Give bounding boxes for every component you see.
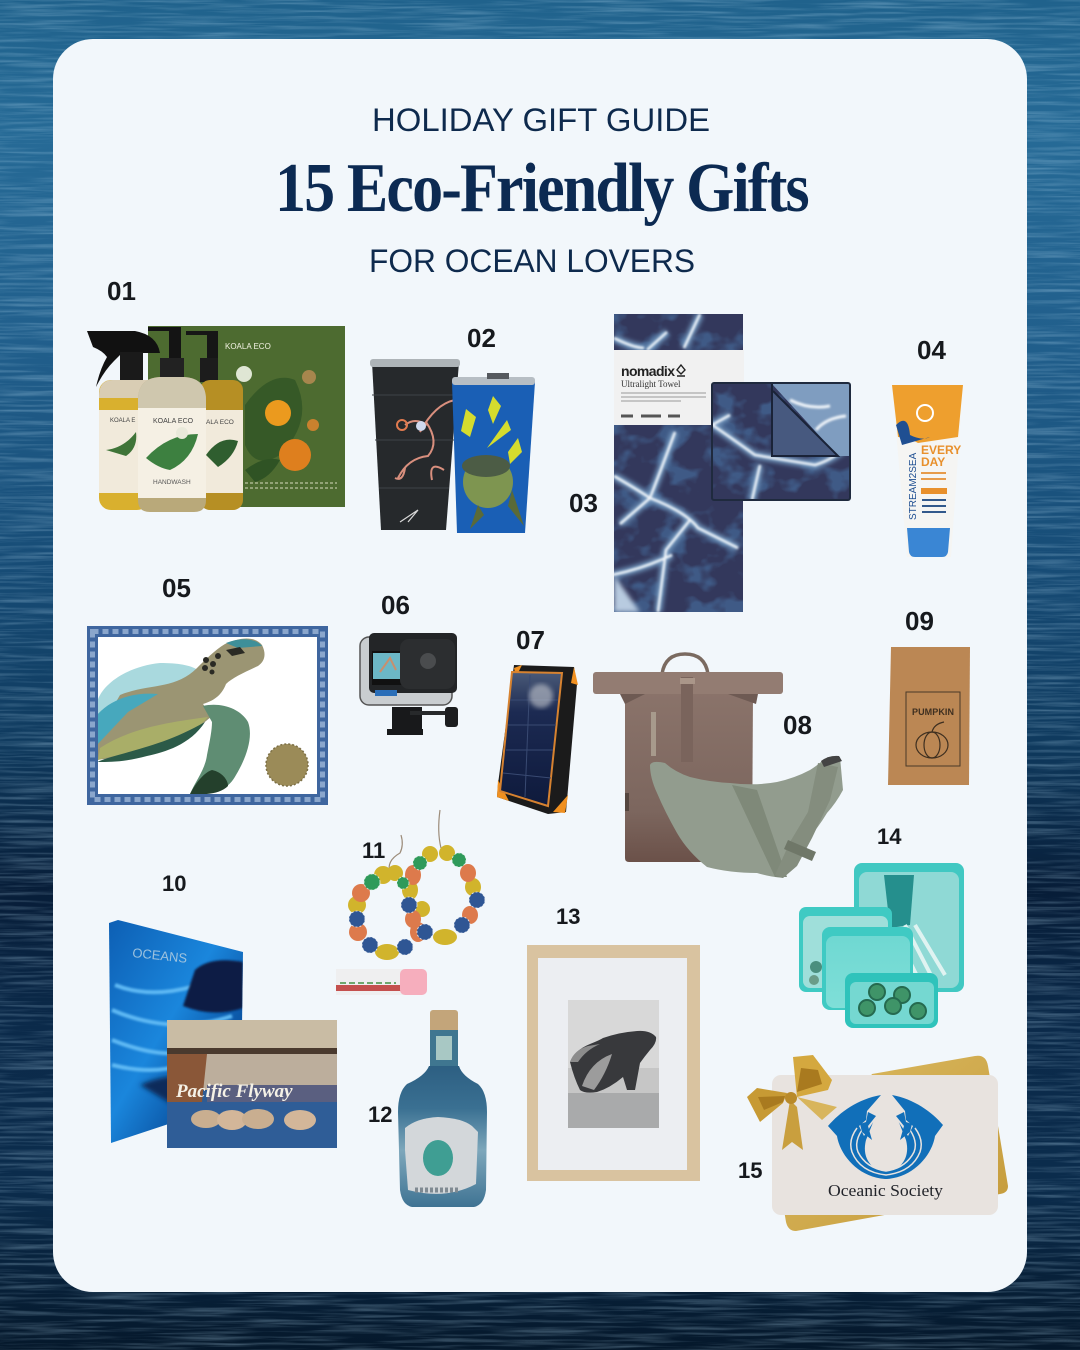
label 09: 09 [905, 606, 934, 636]
gold seal [266, 744, 308, 786]
item 04: Stream2Sea sunscreen: EVERY [921, 443, 961, 457]
sling bag [650, 756, 843, 878]
Oceans book [109, 920, 243, 1143]
item 04: Stream2Sea sunscreen: DAY [921, 455, 945, 469]
Pacific Flyway book: Pacific Flyway [175, 1081, 293, 1102]
item 15: Oceanic Society gift card [747, 1055, 1008, 1231]
item 05: turtle adoption certificate [87, 626, 328, 805]
folded towel [705, 383, 850, 500]
lip balm [336, 969, 427, 995]
long towel [612, 314, 744, 612]
small bag with kiwi [845, 973, 938, 1028]
title: 15 Eco-Friendly Gifts [275, 150, 808, 227]
label 13: 13 [556, 904, 580, 929]
label 02: 02 [467, 323, 496, 353]
large bag [854, 863, 964, 992]
blue tumbler [452, 373, 535, 533]
item 01: Koala Eco gift set [87, 326, 345, 512]
item 11: beaded earrings [348, 810, 485, 960]
long towel: nomadix [621, 363, 675, 379]
gold back card [784, 1056, 1008, 1231]
Oceans book: OCEANS [132, 945, 188, 966]
item 03: Nomadix towel [612, 314, 850, 612]
label 05: 05 [162, 573, 191, 603]
handwash bottle: KOALA ECO [153, 418, 194, 425]
item 06: GoPro camera [360, 633, 458, 735]
label 15: 15 [738, 1158, 762, 1183]
item 10: ocean books [109, 920, 337, 1148]
card text: Oceanic Society [828, 1181, 944, 1200]
handwash bottle: HANDWASH [153, 479, 191, 486]
green gift box: KOALA ECO [225, 342, 271, 351]
left bag [799, 907, 892, 992]
certificate border [87, 626, 328, 805]
subtitle: FOR OCEAN LOVERS [369, 243, 695, 279]
whale photograph [568, 1000, 659, 1128]
spray bottle [87, 331, 160, 510]
roll-top backpack [593, 654, 783, 862]
green gift box [148, 326, 345, 507]
label 07: 07 [516, 625, 545, 655]
spray bottle: KOALA E [110, 418, 135, 424]
dolphin logo [828, 1095, 943, 1179]
handwash bottle [138, 327, 206, 512]
item 14: silicone storage bags [799, 863, 964, 1028]
item 09: pumpkin tea pouch: PUMPKIN [912, 707, 954, 717]
soap bottle right: ALA ECO [206, 419, 234, 426]
middle bag [822, 927, 913, 1010]
item 08: backpack and sling bag [593, 654, 843, 878]
gold bow [747, 1055, 837, 1150]
soap bottle right [186, 331, 243, 510]
item 13: whale framed print [527, 945, 700, 1181]
item 07: solar power bank [497, 665, 578, 814]
item 09: pumpkin tea pouch [888, 647, 970, 785]
item 04: Stream2Sea sunscreen [892, 385, 963, 557]
item 02: tumblers [370, 359, 535, 533]
label 08: 08 [783, 710, 812, 740]
long towel: Ultralight Towel [621, 379, 681, 389]
item 12: blue bottle [398, 1010, 487, 1207]
label 06: 06 [381, 590, 410, 620]
heading: holiday gift guide: HOLIDAY GIFT GUIDE [372, 102, 710, 138]
label 03: 03 [569, 488, 598, 518]
label 14: 14 [877, 824, 902, 849]
sea turtle illustration [97, 638, 265, 794]
Pacific Flyway book [167, 1020, 337, 1148]
label 01: 01 [107, 276, 136, 306]
white front card [772, 1075, 998, 1215]
item 04: Stream2Sea sunscreen: STREAM2SEA [908, 452, 919, 520]
black tumbler [370, 359, 460, 530]
label 12: 12 [368, 1102, 392, 1127]
label 04: 04 [917, 335, 946, 365]
label 10: 10 [162, 871, 186, 896]
label 11: 11 [362, 838, 385, 863]
